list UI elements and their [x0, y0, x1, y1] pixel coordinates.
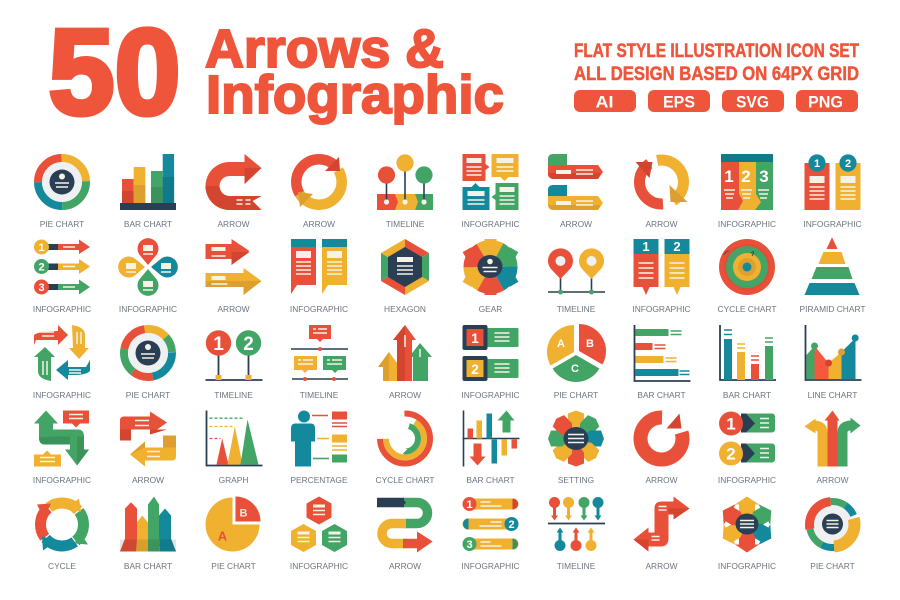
- icon: pie A B: B: [240, 508, 248, 520]
- icon: three numbered columns: [721, 154, 773, 210]
- label: BAR CHART: [124, 561, 172, 571]
- icon: numbered boxes: 1: [471, 330, 479, 346]
- icon: three up arrows: [378, 325, 432, 381]
- label: PIE CHART: [126, 390, 170, 400]
- label: INFOGRAPHIC: [718, 561, 776, 571]
- label: PIE CHART: [810, 561, 855, 571]
- icon: three numbered columns: 1: [724, 167, 734, 186]
- badge: PNG: PNG: [808, 92, 843, 112]
- title: Infographic: Infographic: [206, 65, 504, 125]
- label: INFOGRAPHIC: [33, 475, 91, 485]
- icon: cycle four arrows: [37, 498, 88, 550]
- label: ARROW: [217, 219, 250, 229]
- label: BAR CHART: [466, 475, 515, 485]
- icon: line chart: [806, 325, 862, 380]
- icon: three numbered columns: 2: [741, 167, 751, 186]
- icon: three numbered bars: 3: [466, 539, 473, 551]
- icon: timeline 1 2: [206, 330, 262, 380]
- icon: arrow gear: [717, 496, 777, 552]
- badge: AI: [574, 90, 636, 112]
- label: INFOGRAPHIC: [33, 304, 91, 314]
- icon: pie ABC: B: [586, 338, 594, 350]
- icon: triangle graph: [206, 410, 262, 466]
- label: TIMELINE: [300, 390, 339, 400]
- label: INFOGRAPHIC: [632, 304, 691, 314]
- label: INFOGRAPHIC: [33, 390, 91, 400]
- icon: numbered arrows: 1: [38, 242, 45, 254]
- icon: horizontal bar chart: [634, 325, 690, 381]
- badge: SVG: SVG: [736, 92, 769, 112]
- icon: ring arrow: [296, 157, 342, 207]
- label: TIMELINE: [557, 561, 596, 571]
- icon: pie chart: [38, 158, 86, 206]
- label: INFOGRAPHIC: [290, 304, 348, 314]
- label: INFOGRAPHIC: [461, 390, 520, 400]
- title: Arrows &: Arrows &: [205, 19, 444, 79]
- icon: pie ring with thick segments: [810, 502, 856, 548]
- icon: two tab arrows: [548, 154, 603, 210]
- icon: four direction arrows: [34, 325, 90, 381]
- label: ARROW: [389, 561, 421, 571]
- icon: numbered arrows: 3: [38, 282, 45, 294]
- icon: pie ring: [124, 329, 172, 377]
- icon: S arrow with boxes: [34, 410, 89, 466]
- icon: three numbered columns: 3: [759, 167, 769, 186]
- subtitle line 2: ALL DESIGN BASED ON 64PX GRID: [574, 63, 859, 85]
- icon: step arrow: [634, 496, 690, 552]
- icon: numbered arrows: 2: [38, 262, 45, 274]
- icon: four petals: [118, 238, 178, 296]
- icon: pie ABC: C: [571, 363, 579, 375]
- icon: opposite arrows: [120, 412, 176, 466]
- label: GEAR: [479, 304, 502, 314]
- label: INFOGRAPHIC: [803, 219, 862, 229]
- label: ARROW: [645, 475, 678, 485]
- label: PIE CHART: [554, 390, 598, 400]
- icon: pie ABC: [547, 324, 606, 382]
- label: HEXAGON: [384, 304, 426, 314]
- icon: timeline speech boxes: [291, 325, 348, 381]
- label: ARROW: [560, 219, 592, 229]
- label: CYCLE CHART: [376, 475, 434, 485]
- label: INFOGRAPHIC: [718, 475, 776, 485]
- label: TIMELINE: [386, 219, 425, 229]
- label: INFOGRAPHIC: [461, 219, 520, 229]
- label: ARROW: [645, 219, 678, 229]
- icon: pie ABC: A: [557, 338, 565, 350]
- icon: person percentage: [291, 410, 347, 466]
- icon: two banner panels: [291, 239, 347, 294]
- icon: numbered boxes: 2: [471, 361, 479, 377]
- icon: pie A B: [206, 496, 260, 552]
- label: BAR CHART: [723, 390, 771, 400]
- icon: four speech boxes: [462, 154, 518, 210]
- icon: bar chart: [120, 154, 176, 210]
- label: ARROW: [217, 304, 250, 314]
- icon: timeline 1 2: 2: [243, 334, 254, 355]
- label: INFOGRAPHIC: [119, 304, 177, 314]
- icon: numbered boxes: [462, 325, 518, 381]
- icon: two curved arrows: [636, 160, 688, 204]
- badge: PNG: [796, 90, 858, 112]
- icon: two straight arrows: [206, 239, 262, 295]
- icon: gear: [463, 239, 518, 295]
- label: PIE CHART: [40, 219, 84, 229]
- icon: three numbered bars: 2: [508, 519, 515, 531]
- label: INFOGRAPHIC: [718, 219, 776, 229]
- badge: SVG: [722, 90, 784, 112]
- label: TIMELINE: [557, 304, 596, 314]
- label: INFOGRAPHIC: [290, 561, 348, 571]
- icon: two numbered panels: [804, 154, 860, 210]
- icon: pie A B: A: [218, 528, 228, 544]
- label: GRAPH: [219, 475, 248, 485]
- icon: two numbered panels: 2: [845, 158, 851, 170]
- icon: timeline 1 2: 1: [213, 334, 224, 355]
- icon: positive negative bar chart: [462, 410, 520, 466]
- icon: map pins timeline: [548, 248, 605, 294]
- label: TIMELINE: [214, 390, 253, 400]
- icon: three numbered bars: 1: [466, 499, 473, 511]
- label: INFOGRAPHIC: [461, 561, 520, 571]
- label: BAR CHART: [124, 219, 172, 229]
- label: PERCENTAGE: [290, 475, 348, 485]
- icon: numbered panels with tails: 2: [673, 239, 681, 254]
- label: ARROW: [816, 475, 849, 485]
- label: PIE CHART: [211, 561, 256, 571]
- icon: two numbered panels: 1: [814, 158, 820, 170]
- icon: three way arrows: [804, 410, 860, 466]
- icon: vertical bar chart: [720, 325, 776, 380]
- label: SETTING: [558, 475, 594, 485]
- title: big number 50: 50: [48, 4, 180, 140]
- icon: numbered panels with tails: [634, 239, 690, 295]
- icon: numbered arrows: [34, 240, 90, 294]
- badge: EPS: [648, 90, 710, 112]
- label: CYCLE: [48, 561, 76, 571]
- label: ARROW: [303, 219, 335, 229]
- label: LINE CHART: [808, 390, 857, 400]
- icon: three hexagons: [291, 496, 347, 552]
- icon: snake arrow: [377, 498, 433, 552]
- label: ARROW: [132, 475, 164, 485]
- icon: hexagon: [381, 239, 429, 295]
- icon: numbered panels with tails: 1: [642, 239, 650, 254]
- icon: timeline pins: [377, 154, 433, 210]
- icon: numbered pills: [719, 412, 775, 466]
- label: ARROW: [645, 561, 678, 571]
- label: PIRAMID CHART: [800, 304, 865, 314]
- label: BAR CHART: [637, 390, 686, 400]
- label: ARROW: [389, 390, 421, 400]
- icon: pyramid chart: [804, 237, 860, 295]
- icon: seven key timeline: [548, 497, 605, 551]
- icon: numbered pills: 2: [726, 444, 736, 464]
- icon: concentric cycle chart: [719, 239, 775, 295]
- icon: numbered pills: 1: [726, 414, 736, 434]
- icon: setting gear: [548, 410, 604, 466]
- icon: spiral cycle chart: [380, 414, 430, 464]
- icon: three numbered bars: [462, 497, 518, 551]
- badge: AI: AI: [596, 92, 614, 112]
- icon: circular arrow: [640, 414, 682, 460]
- icon: bar arrows: [120, 496, 176, 552]
- label: CYCLE CHART: [718, 304, 776, 314]
- icon: u-turn arrow: [206, 154, 262, 210]
- badge: EPS: EPS: [663, 92, 695, 112]
